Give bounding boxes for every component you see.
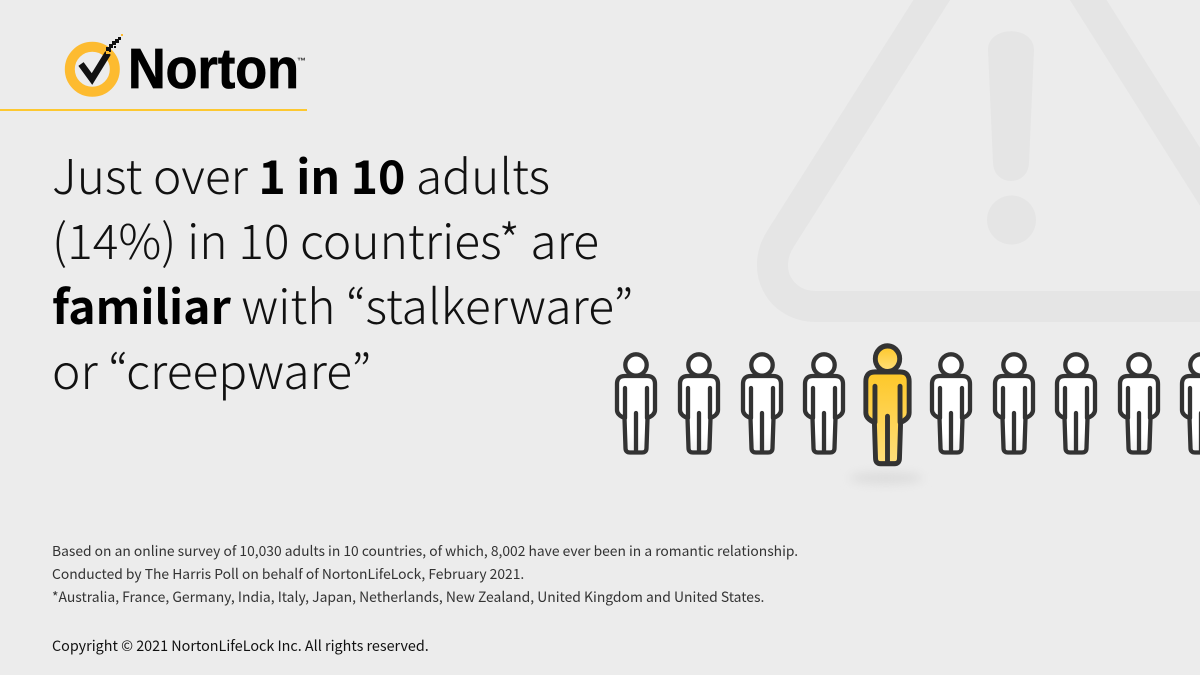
headline: Just over 1 in 10 adults <box>52 138 550 208</box>
Norton logo <box>64 34 306 101</box>
survey note <box>52 540 798 607</box>
yellow rule <box>0 109 307 111</box>
headline: (14%) in 10 countries* are <box>52 203 599 273</box>
person 2 <box>680 354 718 452</box>
survey note: Conducted by The Harris Poll on behalf of NortonLifeLock, February 2021. <box>52 563 524 583</box>
headline <box>52 138 633 403</box>
person 7 <box>995 354 1033 452</box>
copyright: Copyright © 2021 NortonLifeLock Inc. All rights reserved. <box>52 635 429 656</box>
person 6 <box>932 354 970 452</box>
icon: yellow ring with check mark <box>70 34 123 92</box>
person 8 <box>1057 354 1095 452</box>
survey note: Based on an online survey of 10,030 adults in 10 countries, of which, 8,002 have ever been in a romantic relationship. <box>52 540 798 560</box>
survey note: *Australia, France, Germany, India, Italy, Japan, Netherlands, New Zealand, United Kingdom and United States. <box>52 587 764 607</box>
person 4 <box>805 354 843 452</box>
person 3 <box>743 354 781 452</box>
person 1 <box>617 354 655 452</box>
wordmark: Norton <box>128 37 299 101</box>
highlighted person <box>866 346 909 464</box>
trademark: ™ <box>297 56 306 66</box>
highlighted person shadow <box>849 472 923 484</box>
headline: familiar with “stalkerware” <box>52 268 633 338</box>
headline: or “creepware” <box>52 333 371 403</box>
person 10 <box>1182 354 1200 452</box>
person 9 <box>1120 354 1158 452</box>
